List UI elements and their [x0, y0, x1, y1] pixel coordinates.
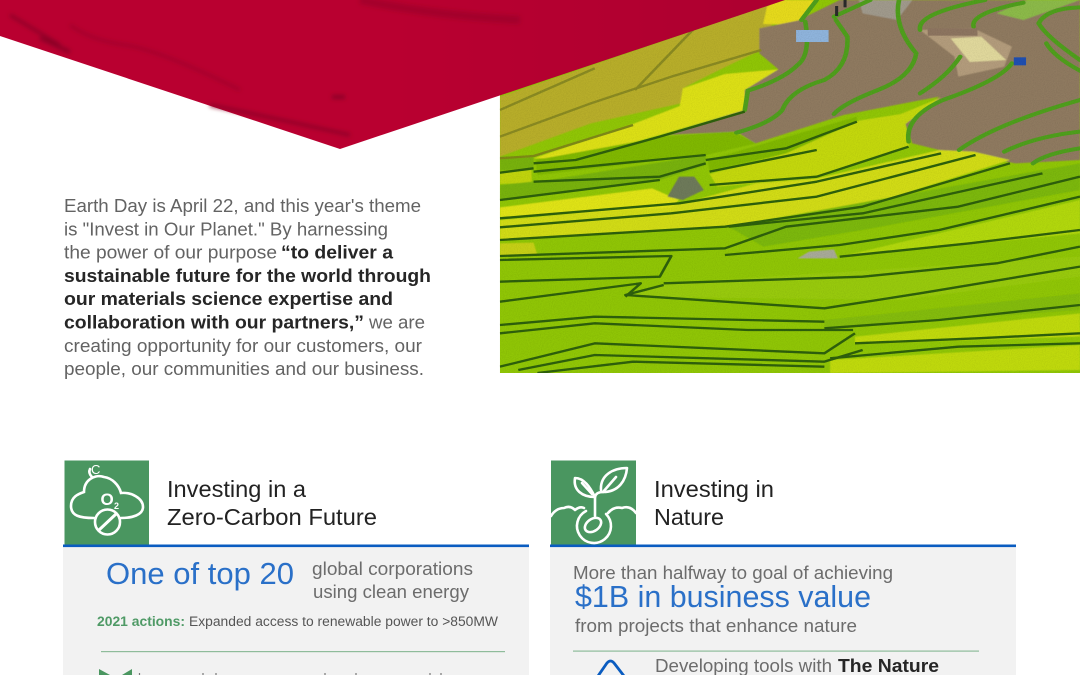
photo: green and yellow rice terraces [500, 0, 1080, 373]
terrace dikes [736, 0, 1080, 163]
intro paragraph: our materials science expertise and [64, 288, 393, 309]
intro paragraph: is "Invest in Our Planet." By harnessing [64, 218, 388, 239]
stat description: using clean energy [313, 581, 470, 602]
divider [101, 651, 505, 652]
heading: Investing in [654, 476, 774, 502]
icon: green bowtie cropped at bottom edge [99, 669, 132, 675]
intro paragraph: Earth Day is April 22, and this year's theme [64, 195, 421, 216]
icon: seedling in soil [551, 460, 636, 544]
intro paragraph: creating opportunity for our customers, our [64, 335, 422, 356]
stat description [312, 558, 473, 602]
workers and tarps [796, 0, 1026, 65]
icon: blue triangle cropped at bottom edge [598, 661, 624, 675]
panel background [63, 546, 529, 675]
stat: one of top 20: One of top 20 [106, 557, 294, 591]
stat: $1B in business value: $1B in business value [575, 580, 871, 614]
heading: Investing in a [167, 476, 306, 502]
intro paragraph: we are [368, 312, 425, 332]
panel background [550, 546, 1016, 675]
panel: nature [550, 460, 1016, 675]
intro paragraph: people, our communities and our business. [64, 358, 424, 379]
intro paragraph: collaboration with our partners,” [64, 312, 364, 332]
red banner chevron [0, 0, 785, 149]
intro paragraph: sustainable future for the world through [64, 265, 431, 286]
terrace shadow lines [500, 28, 1080, 373]
heading [167, 476, 377, 530]
partnership text [655, 655, 939, 675]
2021 actions line: Expanded access to renewable power to >850MW [189, 614, 498, 629]
heading: Zero-Carbon Future [167, 504, 377, 530]
icon: cloud with O2 and no symbol: 2 [114, 501, 119, 511]
blue rule [550, 544, 1016, 547]
divider [573, 650, 979, 652]
icon: cloud with O2 and no symbol: C [91, 462, 100, 477]
panel: zero-carbon future [63, 460, 529, 675]
intro paragraph: the power of our purpose [64, 242, 277, 263]
stat lead-in: More than halfway to goal of achieving [573, 562, 893, 583]
intro paragraph [64, 195, 431, 379]
icon: cloud with O2 and no symbol: O [100, 490, 114, 509]
cropped line of text [140, 673, 441, 675]
heading [654, 476, 774, 530]
stat description: from projects that enhance nature [575, 615, 857, 636]
blue rule [63, 544, 529, 547]
2021 actions line: 2021 actions: [97, 614, 185, 629]
heading: Nature [654, 504, 724, 530]
icon: cloud with O2 and no symbol [64, 460, 149, 544]
intro paragraph: “to deliver a [281, 242, 394, 263]
stat description: global corporations [312, 558, 473, 579]
